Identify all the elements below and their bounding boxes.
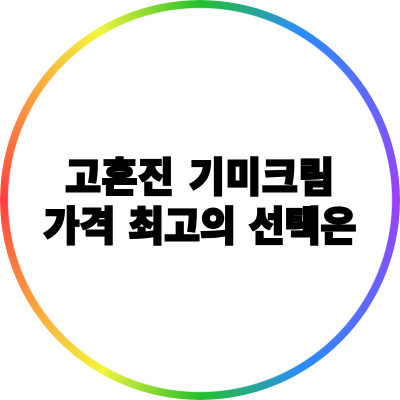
title: 고혼진 기미크림 bbox=[65, 156, 335, 200]
title: 가격 최고의 선택은 bbox=[44, 205, 356, 249]
title bbox=[43, 156, 356, 249]
